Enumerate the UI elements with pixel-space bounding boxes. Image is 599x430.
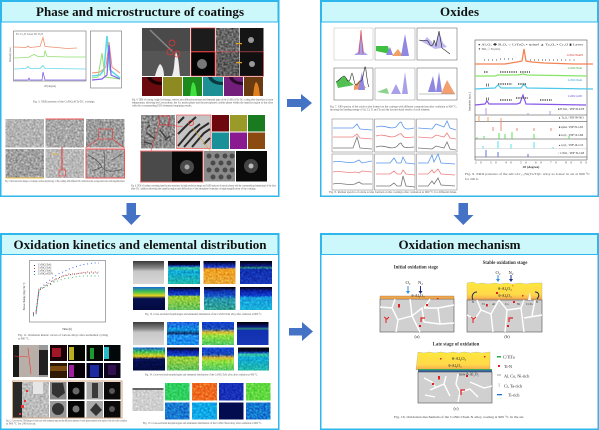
chart: XRD of oxide scales: ● Al₂O₃ ◆ B₂O₃ ○ CrTaO₄ ▪ spinel ▲ Ta₂O₅ ▪ Cr₂O ▮ Laves [478, 42, 583, 46]
caption [131, 184, 277, 190]
arrow: phase to kinetics [122, 203, 141, 225]
legend: Ti-N [504, 364, 512, 369]
caption: Fig. 6. TEM of coating containing lamellar microstructure, the high resolution image and SAED patterns of eutectic phases with the corresponding element maps of the alloy [131, 184, 277, 188]
chart: XRD of oxide scales [468, 40, 593, 169]
heading: oxides [322, 2, 598, 22]
chart: XRD of oxide scales: CoNiCrTaAlN [567, 54, 583, 57]
chart: XRD of oxide scales: ■ Al₂O₃ / PDF 50-1496 [559, 134, 584, 137]
caption [330, 106, 457, 112]
chart: XRD of oxide scales: 2θ (degree) [523, 165, 540, 169]
chart: oxidation mass gain curves: Time (h) [62, 328, 72, 331]
legend: Cr, Ta-rich [504, 384, 523, 390]
chart: oxidation mass gain curves: CoNiCrAlTiN [38, 272, 53, 276]
chart: oxidation mass gain curves: Mass change (mg·cm⁻²) [23, 283, 26, 310]
chart: XRD of oxide scales: ■ B-TaO₂ / PDF 89-0478 [558, 108, 585, 111]
heading: oxidation kinetics [2, 234, 278, 254]
caption: Fig. 11. Oxidation kinetic curves of various alloys after isothermal cycling [18, 334, 109, 337]
chart: XRD of oxide scales: ● Al₂O₃ / PDF 46-1212 [559, 144, 584, 147]
diagram: late stage of oxidation: Late stage of oxidation [433, 342, 480, 348]
diagram: stable oxidation stage: Al [492, 302, 495, 306]
chart: XRD of oxide scales: ■ spinel / PDF 82-1202 [559, 126, 584, 129]
caption: Fig. 13. Cross-sectional morphologies and elemental distribution of the CoNiCrTaAl alloy after oxidation at 900 °C. [145, 313, 262, 316]
panel: oxidation kinetics [1, 234, 279, 429]
panel: oxides [321, 1, 598, 196]
diagram: stable oxidation stage: θ-Al₂O₃ [499, 293, 512, 298]
arrow: kinetics to mechanism [289, 322, 313, 341]
image group: TEM bright field with maps [142, 28, 264, 76]
legend: C/TiTa [503, 354, 515, 360]
diagram: initial oxidation stage: Initial oxidation stage [394, 266, 438, 270]
diagram: initial oxidation stage: θ-Al₂O₃ [412, 293, 425, 298]
chart: XRD of oxide scales: Intensity (a.u.) [468, 92, 472, 111]
caption: Fig. 4. TEM of coating: bright field image, selected area diffraction patterns and elemental maps of the CoNiCrAlTa-TiC coating after deposition at room [132, 98, 273, 102]
chart group: Raman spectra [332, 119, 457, 190]
caption [6, 420, 127, 426]
image group: lamellar structure and maps [140, 115, 267, 182]
diagram: stable oxidation stage: (b) [504, 334, 510, 339]
chart: XRD peak close-up [90, 31, 122, 88]
image group: EPMA maps alloy one [133, 261, 272, 310]
chart: XRD patterns of coatings: Intensity (a.u.) [9, 47, 12, 62]
diagram: initial oxidation stage: N₂ [418, 280, 423, 285]
diagram: stable oxidation stage [467, 261, 542, 339]
diagram: initial oxidation stage: O₂ [406, 280, 411, 285]
chart: oxidation mass gain curves: CoNiCrTaAl [38, 270, 52, 272]
chart: XRD patterns of coatings: 2θ (degree) [44, 85, 56, 88]
diagram: stable oxidation stage: N₂ [509, 270, 514, 275]
caption: after TiC addition showing the lamellar region and diffraction of the interphase boundary at high magnification of the coatings. [131, 188, 256, 190]
diagram: initial oxidation stage [380, 266, 454, 339]
diagram: late stage of oxidation [416, 342, 492, 411]
chart: oxidation mass gain curves: CoNiCrTaAl [38, 266, 52, 270]
caption: Fig. 5. Microstructure images of coatings: surface morphology of the coatings with different TiC additions in the as-deposited state with magnified inset. [5, 180, 125, 183]
caption: Fig. 16. Oxidation mechanism of the CoNiCrTaAl-N alloy coating at 900 °C in the air. [394, 416, 524, 419]
image group: EPMA maps alloy three [132, 383, 270, 420]
arrow: oxides to mechanism [454, 203, 474, 225]
diagram: late stage of oxidation: new θ-Al₂O₃ [459, 372, 479, 376]
diagram: initial oxidation stage: (a) [414, 334, 420, 339]
chart: oxidation mass gain curves [23, 260, 106, 331]
chart: XRD of oxide scales: ○ CrTaO₄ / PDF 39-1428 [558, 152, 585, 155]
image group: SEM surface micrographs [6, 119, 124, 178]
heading: oxidation mechanism: Oxidation mechanism [398, 237, 521, 252]
caption: Fig. 7. XPS spectra of the oxide scales formed on the coatings with different compositions after oxidation at 900 °C, [330, 106, 457, 108]
caption [18, 334, 109, 340]
heading: oxidation kinetics: Oxidation kinetics and elemental distribution [14, 237, 267, 252]
caption: Fig. 12. Cross-section TEM image of oxide scale with elemental maps and the diffraction patterns of oxide phases marked in the region of the alloy after oxidation [6, 420, 127, 422]
image group: EPMA maps alloy two [133, 322, 269, 370]
chart: XRD patterns of coatings [9, 31, 86, 88]
heading: oxides: Oxides [440, 4, 479, 19]
diagram: stable oxidation stage: Ti [482, 302, 485, 306]
diagram: late stage of oxidation: θ-Al₂O₃ [449, 363, 462, 368]
panel: oxidation mechanism [321, 234, 598, 429]
heading: phase and microstructure [2, 2, 278, 22]
chart: XRD of oxide scales: CoNiCrTaAl [568, 79, 582, 82]
caption: showing the binding energy of Al, Cr, Ti and Ta and the deconvoluted results of each element. [330, 108, 430, 112]
chart: XRD patterns of coatings: Fcc Cr₂Ti Laves TiC Ti₂N [16, 33, 43, 36]
diagram: stable oxidation stage: Cr,Ta [526, 302, 533, 307]
chart: XRD of oxide scales: CoNiCrAlTi [568, 95, 582, 98]
image group: elemental maps row [142, 77, 263, 96]
chart group: XPS spectra [334, 28, 457, 100]
diagram: stable oxidation stage: Stable oxidation stage [483, 261, 527, 266]
caption: at 900 °C for 240 h in air. [6, 422, 36, 426]
diagram: stable oxidation stage: Ni [517, 302, 520, 306]
chart: XRD of oxide scales: 20 30 40 50 60 70 80 90 [475, 160, 588, 164]
diagram: stable oxidation stage: N [472, 300, 475, 304]
caption: Fig. 14. Cross-sectional morphologies and elemental distribution of the CoNiCrTaAl alloy after oxidation at 900 °C. [145, 374, 258, 376]
caption: with the corresponding EDS elemental mapping results. [132, 104, 192, 108]
caption: Fig. 3. XRD patterns of the CoNiCrAlTa-TiC coatings. [33, 100, 95, 104]
chart: XRD of oxide scales: ▼ TiO₂ ◇ Ta₂CrO₆ [478, 47, 500, 51]
legend: Al, Co, Ni-rich [504, 374, 530, 380]
caption: at 900 °C. [18, 338, 30, 340]
legend: Ti-rich [508, 392, 520, 398]
diagram: stable oxidation stage: O₂ [496, 270, 501, 275]
image group: TEM diffraction grid [12, 381, 122, 418]
caption [132, 98, 274, 108]
caption: temperature, showing the Laves phase, the fcc matrix phase and the precipitated carbide phase within the lamellar region of the alloy [132, 102, 274, 104]
diagram: late stage of oxidation: θ-Al₂O₃ [452, 356, 467, 361]
caption [465, 172, 591, 181]
caption: Fig. 9. XRD patterns of the AlCoCr₀.₅Ni(Ta/Ti)C alloy as Glass' in air at 900 °C [465, 172, 591, 176]
chart: XRD of oxide scales: ▲ Ta₂O₅ / PDF 89-5613 [558, 116, 584, 120]
arrow: phase to oxides [287, 94, 312, 112]
image group: TEM and elemental maps [13, 345, 120, 378]
chart: XRD of oxide scales: CoNiCrTaAl [568, 67, 582, 70]
diagram: stable oxidation stage: θ-Al₂O₃ [498, 286, 512, 291]
diagram: stable oxidation stage: Co [505, 302, 509, 306]
panel: phase and microstructure [1, 1, 279, 196]
legend [497, 354, 530, 398]
heading: phase and microstructure: Phase and microstructure of coatings [36, 4, 244, 19]
caption: Fig. 15. Cross-sectional morphologies and elemental distribution of the CoNiCrTaAl alloy after oxidation at 900 °C. [143, 422, 262, 425]
heading: oxidation mechanism [322, 234, 598, 254]
chart: oxidation mass gain curves: CoNiCrTaAl [38, 264, 52, 266]
diagram: stable oxidation stage: N [536, 300, 539, 304]
caption: for 240 h. [465, 177, 479, 181]
caption: Fig. 8. Raman spectra of oxide scales formed on the coatings after oxidation at 900 °C for different times. [329, 191, 457, 194]
diagram: late stage of oxidation: (c) [453, 406, 459, 411]
